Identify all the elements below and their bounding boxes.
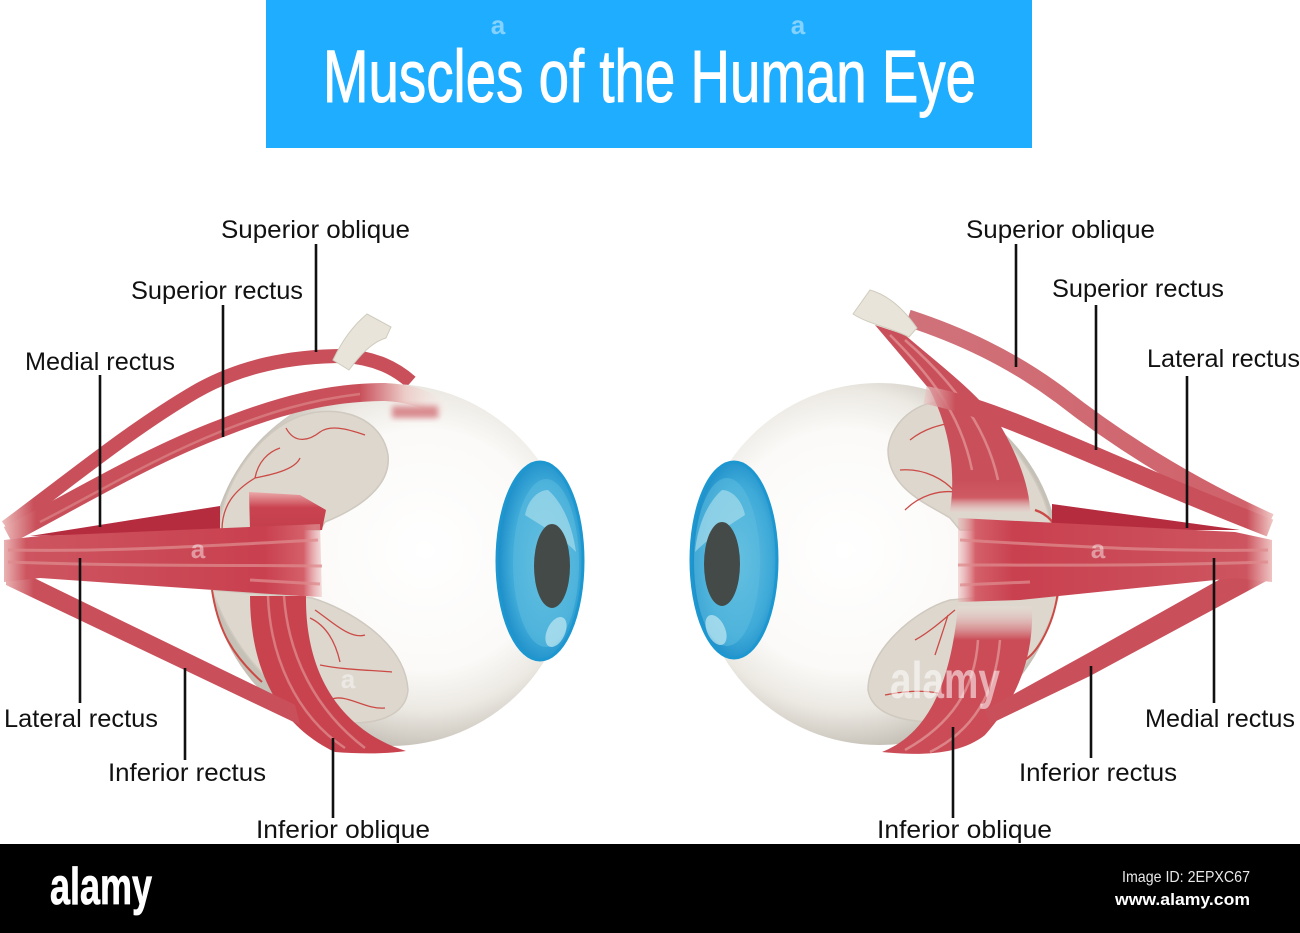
watermarks: a	[791, 10, 806, 40]
upper scleral patch	[888, 402, 1052, 530]
superior oblique fold lines	[890, 335, 998, 480]
watermarks: alamy	[890, 652, 1000, 710]
blood vessels	[212, 428, 392, 708]
medial rectus highlights	[958, 540, 1268, 585]
iris inner ring	[694, 478, 760, 646]
iris inner ring	[513, 479, 579, 647]
iris	[691, 462, 777, 658]
leader: medial rectus	[99, 375, 101, 527]
watermarks: a	[1091, 534, 1106, 564]
eyeball	[698, 383, 1060, 745]
leader: inferior rectus	[1090, 666, 1092, 758]
leader: superior oblique	[1015, 244, 1017, 367]
pupil	[534, 524, 570, 608]
superior oblique muscle	[6, 356, 411, 527]
inferior rectus	[985, 568, 1272, 724]
label: inferior rectus: Inferior rectus	[108, 759, 266, 787]
leader: lateral rectus	[79, 558, 81, 703]
label: lateral rectus: Lateral rectus	[1147, 345, 1300, 373]
label: lateral rectus: Lateral rectus	[4, 705, 158, 733]
inferior oblique fold lines	[268, 596, 365, 748]
upper scleral patch	[219, 411, 388, 530]
medial rectus main muscle	[958, 518, 1272, 602]
label: medial rectus: Medial rectus	[1145, 705, 1295, 733]
watermarks: a	[191, 534, 206, 564]
inferior oblique fold lines	[905, 640, 1000, 752]
lower scleral patch	[868, 590, 1060, 722]
right eye diagram	[691, 290, 1272, 754]
lateral rectus	[4, 524, 322, 597]
leader: superior oblique	[315, 244, 317, 352]
leader: inferior oblique	[952, 727, 954, 818]
watermarks	[191, 10, 1106, 710]
superior rectus	[925, 395, 1270, 528]
leader: inferior rectus	[184, 668, 186, 760]
label: inferior oblique: Inferior oblique	[256, 816, 430, 844]
left eye diagram	[4, 314, 583, 753]
inferior rectus	[6, 572, 300, 725]
iris	[497, 462, 583, 660]
website: www.alamy.com	[1114, 890, 1250, 909]
superior oblique muscle	[908, 318, 1270, 522]
lower iris highlight	[701, 612, 731, 648]
title: Muscles of the Human Eye	[323, 35, 976, 118]
label: inferior oblique: Inferior oblique	[877, 816, 1052, 844]
label: superior rectus: Superior rectus	[1052, 275, 1224, 303]
label: superior oblique: Superior oblique	[966, 216, 1155, 244]
lower scleral patch	[212, 590, 408, 723]
label: superior oblique: Superior oblique	[221, 216, 410, 244]
label: medial rectus: Medial rectus	[25, 348, 175, 376]
leader: medial rectus	[1213, 558, 1215, 703]
iris highlights	[525, 490, 576, 552]
lateral rectus highlights	[8, 540, 322, 584]
leader: lateral rectus	[1186, 376, 1188, 528]
superior rectus	[8, 392, 445, 535]
footer logo: alamy	[50, 858, 152, 916]
iris highlights	[695, 490, 745, 552]
leader: superior rectus	[1095, 305, 1097, 450]
pupil	[704, 522, 740, 606]
watermarks: a	[341, 664, 356, 694]
title banner	[266, 0, 1032, 148]
trochlea	[853, 290, 917, 337]
inferior oblique upper band	[882, 606, 1032, 754]
leader: inferior oblique	[332, 738, 334, 818]
image id: Image ID: 2EPXC67	[1122, 869, 1250, 886]
lower iris highlight	[541, 614, 571, 650]
watermarks: a	[491, 10, 506, 40]
medial rectus wedge	[30, 506, 220, 536]
superior oblique vertical band	[875, 325, 1030, 512]
trochlea	[333, 314, 391, 370]
label: inferior rectus: Inferior rectus	[1019, 759, 1177, 787]
label: superior rectus: Superior rectus	[131, 277, 303, 305]
inferior oblique upper end	[249, 492, 326, 530]
lateral rectus wedge	[1052, 504, 1240, 530]
tendon end	[392, 406, 438, 418]
superior rectus highlight	[40, 394, 360, 522]
leader: superior rectus	[222, 305, 224, 437]
right labels	[877, 216, 1300, 844]
left labels	[4, 216, 430, 844]
blood vessels	[885, 422, 1058, 695]
inferior oblique muscle	[250, 596, 406, 753]
footer bar	[0, 844, 1300, 933]
eyeball	[210, 384, 572, 746]
